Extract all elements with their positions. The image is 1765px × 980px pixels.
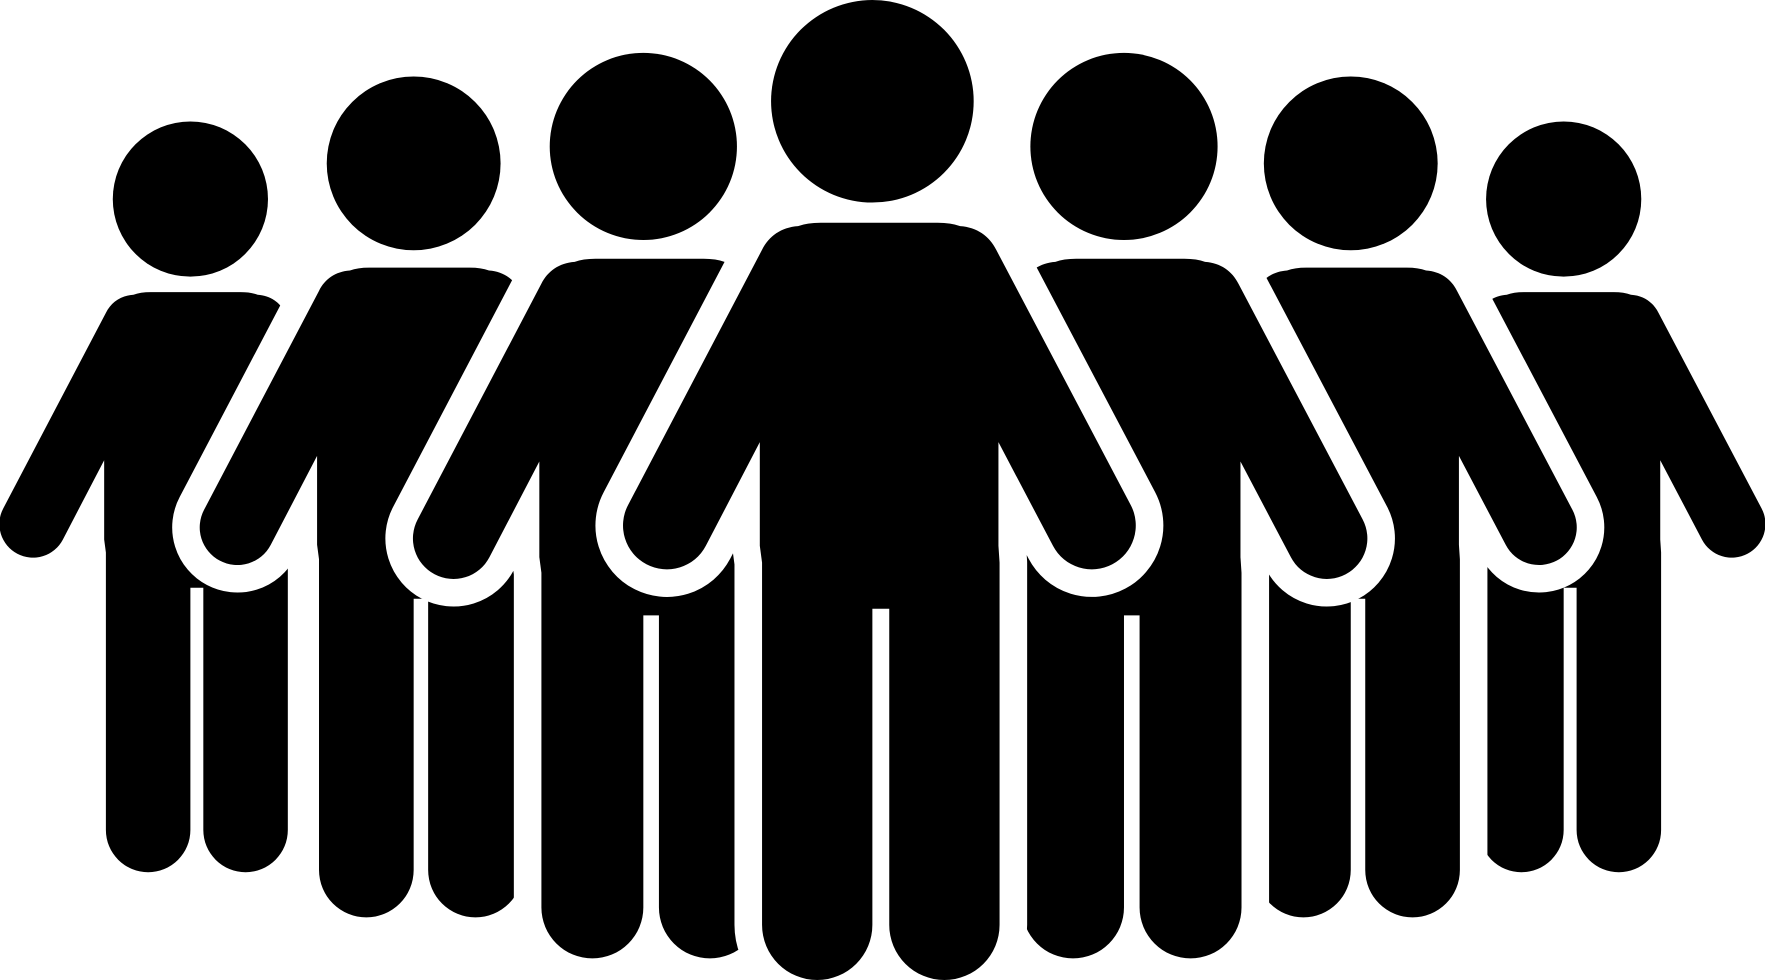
figure: second person from left xyxy=(200,77,640,917)
figure: second person from right xyxy=(1137,77,1577,917)
figure: far left person xyxy=(0,122,392,872)
figure: third person from left xyxy=(413,53,887,958)
figure: center front person xyxy=(623,0,1136,980)
figure: far right person xyxy=(1373,122,1765,872)
figure: third person from right xyxy=(894,53,1367,958)
